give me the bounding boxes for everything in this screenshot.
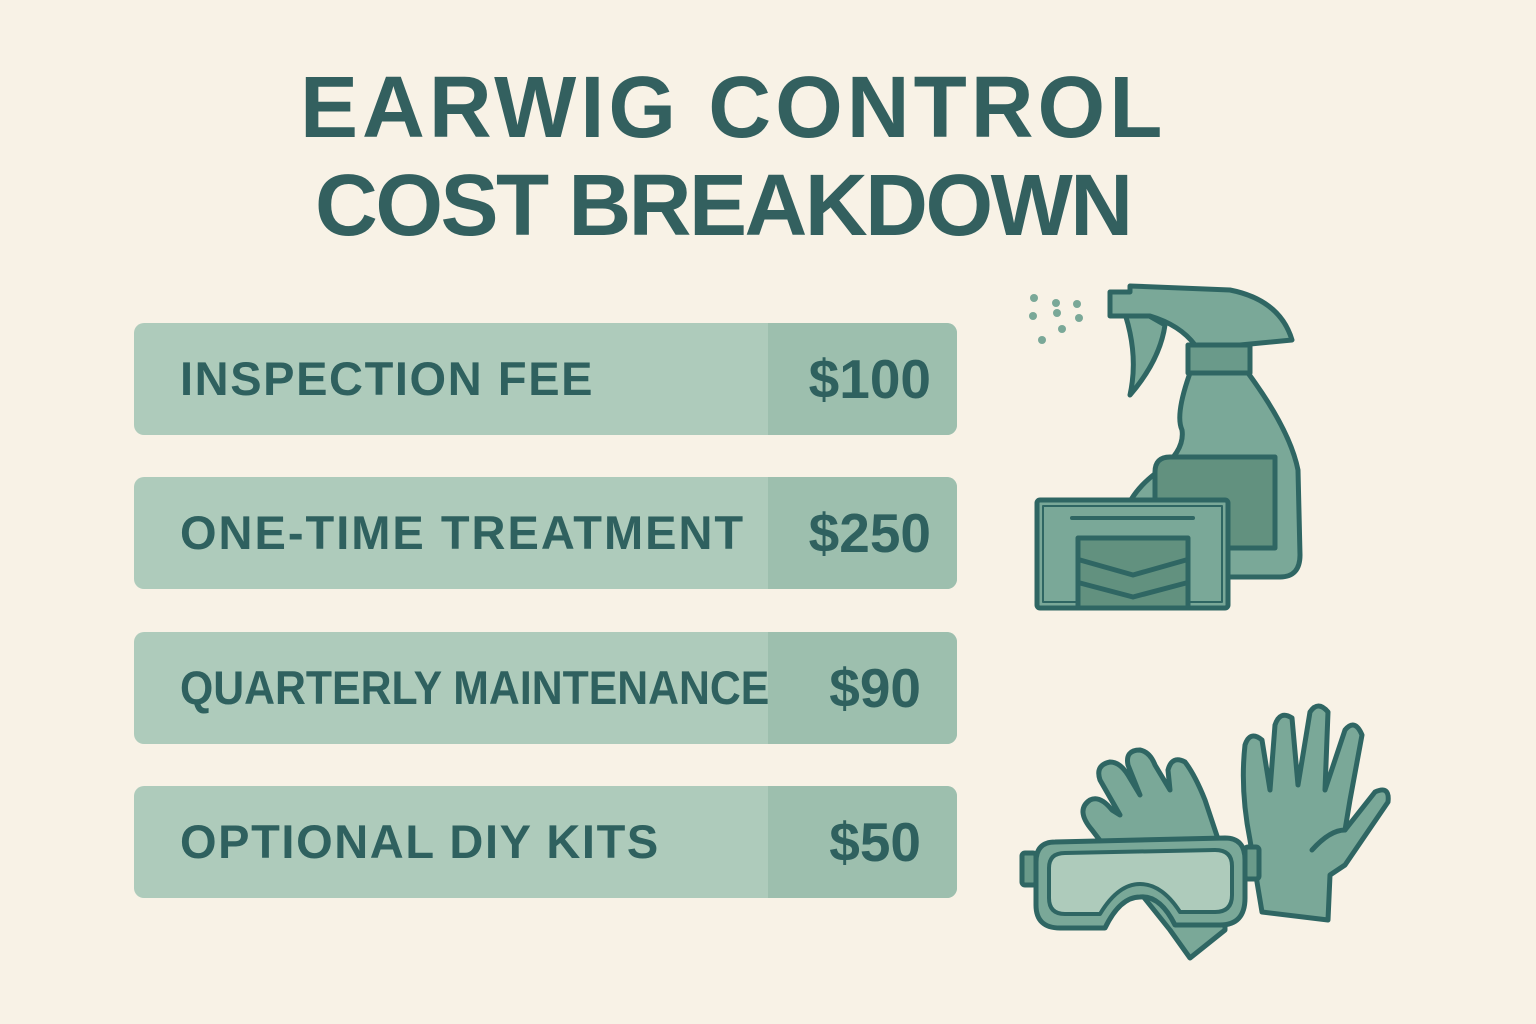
- bar: optional diy kits: $50: [829, 811, 921, 873]
- bar: inspection fee: INSPECTION FEE: [180, 352, 594, 405]
- bar: quarterly maintenance: $90: [829, 657, 921, 719]
- icon: spray bottle: [1110, 286, 1300, 577]
- bar: inspection fee: $100: [809, 348, 931, 410]
- icon: spray dots: [1029, 294, 1083, 344]
- title: COST BREAKDOWN: [315, 157, 1131, 254]
- icon: goggles: [1022, 838, 1259, 928]
- icon: right glove: [1243, 706, 1388, 920]
- icon: left glove: [1083, 750, 1225, 958]
- title: [300, 59, 1166, 254]
- icon: bait box: [1037, 500, 1228, 608]
- bar: optional diy kits: [134, 786, 957, 898]
- bar: one-time treatment: [134, 477, 957, 589]
- bar: one-time treatment: $250: [809, 502, 931, 564]
- bar: quarterly maintenance: QUARTERLY MAINTENANCE: [180, 661, 769, 714]
- title: EARWIG CONTROL: [300, 59, 1166, 156]
- bar: quarterly maintenance: [134, 632, 957, 744]
- bar: inspection fee: [134, 323, 957, 435]
- bar: optional diy kits: OPTIONAL DIY KITS: [180, 815, 660, 868]
- bar: one-time treatment: ONE-TIME TREATMENT: [180, 506, 745, 559]
